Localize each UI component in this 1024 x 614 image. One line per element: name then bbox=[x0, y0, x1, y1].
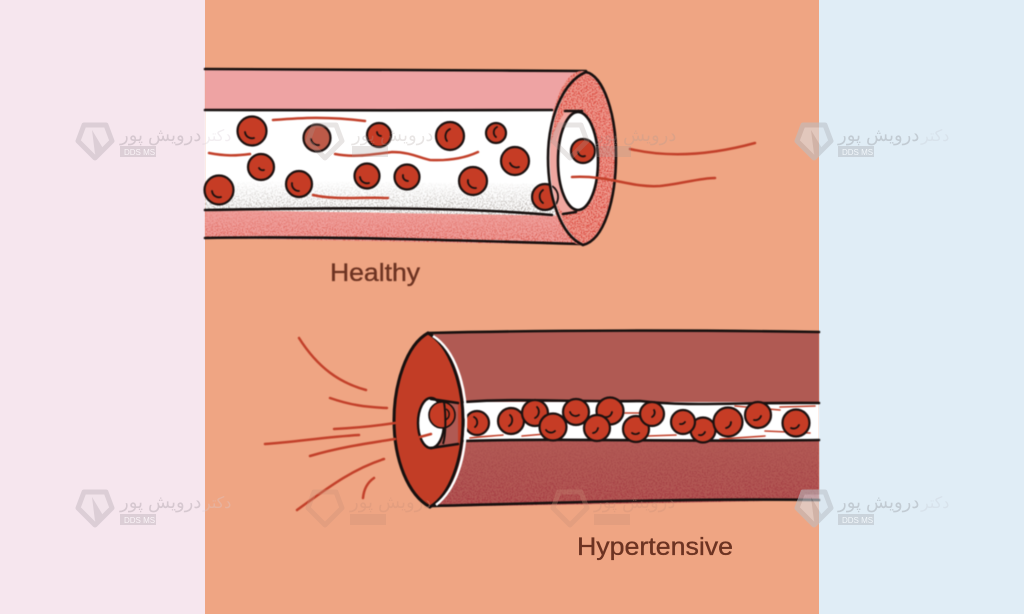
watermark bottom right: درویش پور bbox=[837, 492, 919, 513]
artery end cap bbox=[548, 71, 616, 245]
watermark top left bbox=[78, 125, 231, 158]
watermark top left: DDS MS bbox=[124, 148, 155, 157]
hypertensive artery outlines bbox=[428, 331, 819, 506]
watermark bottom left: درویش پور bbox=[119, 492, 201, 513]
background panel: centre bbox=[205, 0, 819, 614]
thick upper wall bbox=[428, 331, 819, 404]
healthy artery bbox=[204, 69, 755, 245]
watermark bottom centre bbox=[553, 492, 675, 525]
cap highlight bbox=[549, 72, 585, 245]
watermark bottom right: دکتر bbox=[920, 495, 949, 512]
hypertensive end cap bbox=[394, 333, 463, 507]
cell seen through cap bbox=[552, 186, 558, 208]
watermark bottom left: دکتر bbox=[202, 495, 231, 512]
plaque speckle bbox=[205, 180, 570, 216]
watermark top centre-left bbox=[308, 125, 433, 158]
artery upper wall bbox=[205, 69, 586, 112]
hypertensive plasma streaks bbox=[470, 406, 815, 439]
hypertensive blood cells bbox=[465, 398, 810, 442]
watermark top right: درویش پور bbox=[837, 125, 919, 146]
label: Healthy: Healthy bbox=[330, 259, 421, 287]
watermark bottom right: DDS MS bbox=[842, 516, 873, 525]
watermark bottom right bbox=[797, 492, 949, 525]
artery lower wall bbox=[205, 210, 585, 245]
watermark top left: درویش پور bbox=[119, 125, 201, 146]
narrow lumen bbox=[450, 402, 819, 441]
thick lower wall bbox=[430, 440, 819, 507]
watermark bottom centre-left bbox=[308, 492, 431, 525]
healthy blood cells bbox=[204, 116, 558, 210]
narrow opening bbox=[418, 398, 458, 448]
background panel: left strip bbox=[0, 0, 205, 614]
watermark bottom left bbox=[78, 492, 231, 525]
watermark top left: دکتر bbox=[202, 128, 231, 145]
all artwork bbox=[204, 69, 819, 510]
watermark top centre bbox=[553, 125, 676, 158]
watermark bottom left: DDS MS bbox=[124, 516, 155, 525]
watermark top right: دکتر bbox=[920, 128, 949, 145]
healthy plasma streaks bbox=[209, 118, 478, 198]
watermark bottom centre-left: درویش پور bbox=[349, 492, 431, 513]
label: Hypertensive: Hypertensive bbox=[577, 533, 733, 561]
cap outline bbox=[548, 72, 616, 245]
pressure lines leaving hypertensive artery bbox=[265, 338, 395, 510]
watermark top right: DDS MS bbox=[842, 148, 873, 157]
lumen rim strokes bbox=[563, 111, 582, 214]
artery lumen bbox=[205, 110, 575, 216]
white edge on cap bbox=[433, 336, 466, 505]
cell in opening bbox=[571, 139, 595, 163]
artery outlines bbox=[205, 69, 586, 244]
watermark top centre: درویش پور bbox=[594, 125, 676, 146]
cap inner wall, lighter left band bbox=[549, 112, 575, 213]
watermark bottom centre: درویش پور bbox=[593, 492, 675, 513]
hypertensive artery bbox=[265, 331, 819, 510]
watermark top right bbox=[797, 125, 949, 158]
background panel: right strip bbox=[819, 0, 1024, 614]
watermark top centre-left: درویش پور bbox=[351, 125, 433, 146]
flow lines leaving healthy artery bbox=[572, 143, 755, 186]
lumen opening bbox=[558, 112, 598, 210]
